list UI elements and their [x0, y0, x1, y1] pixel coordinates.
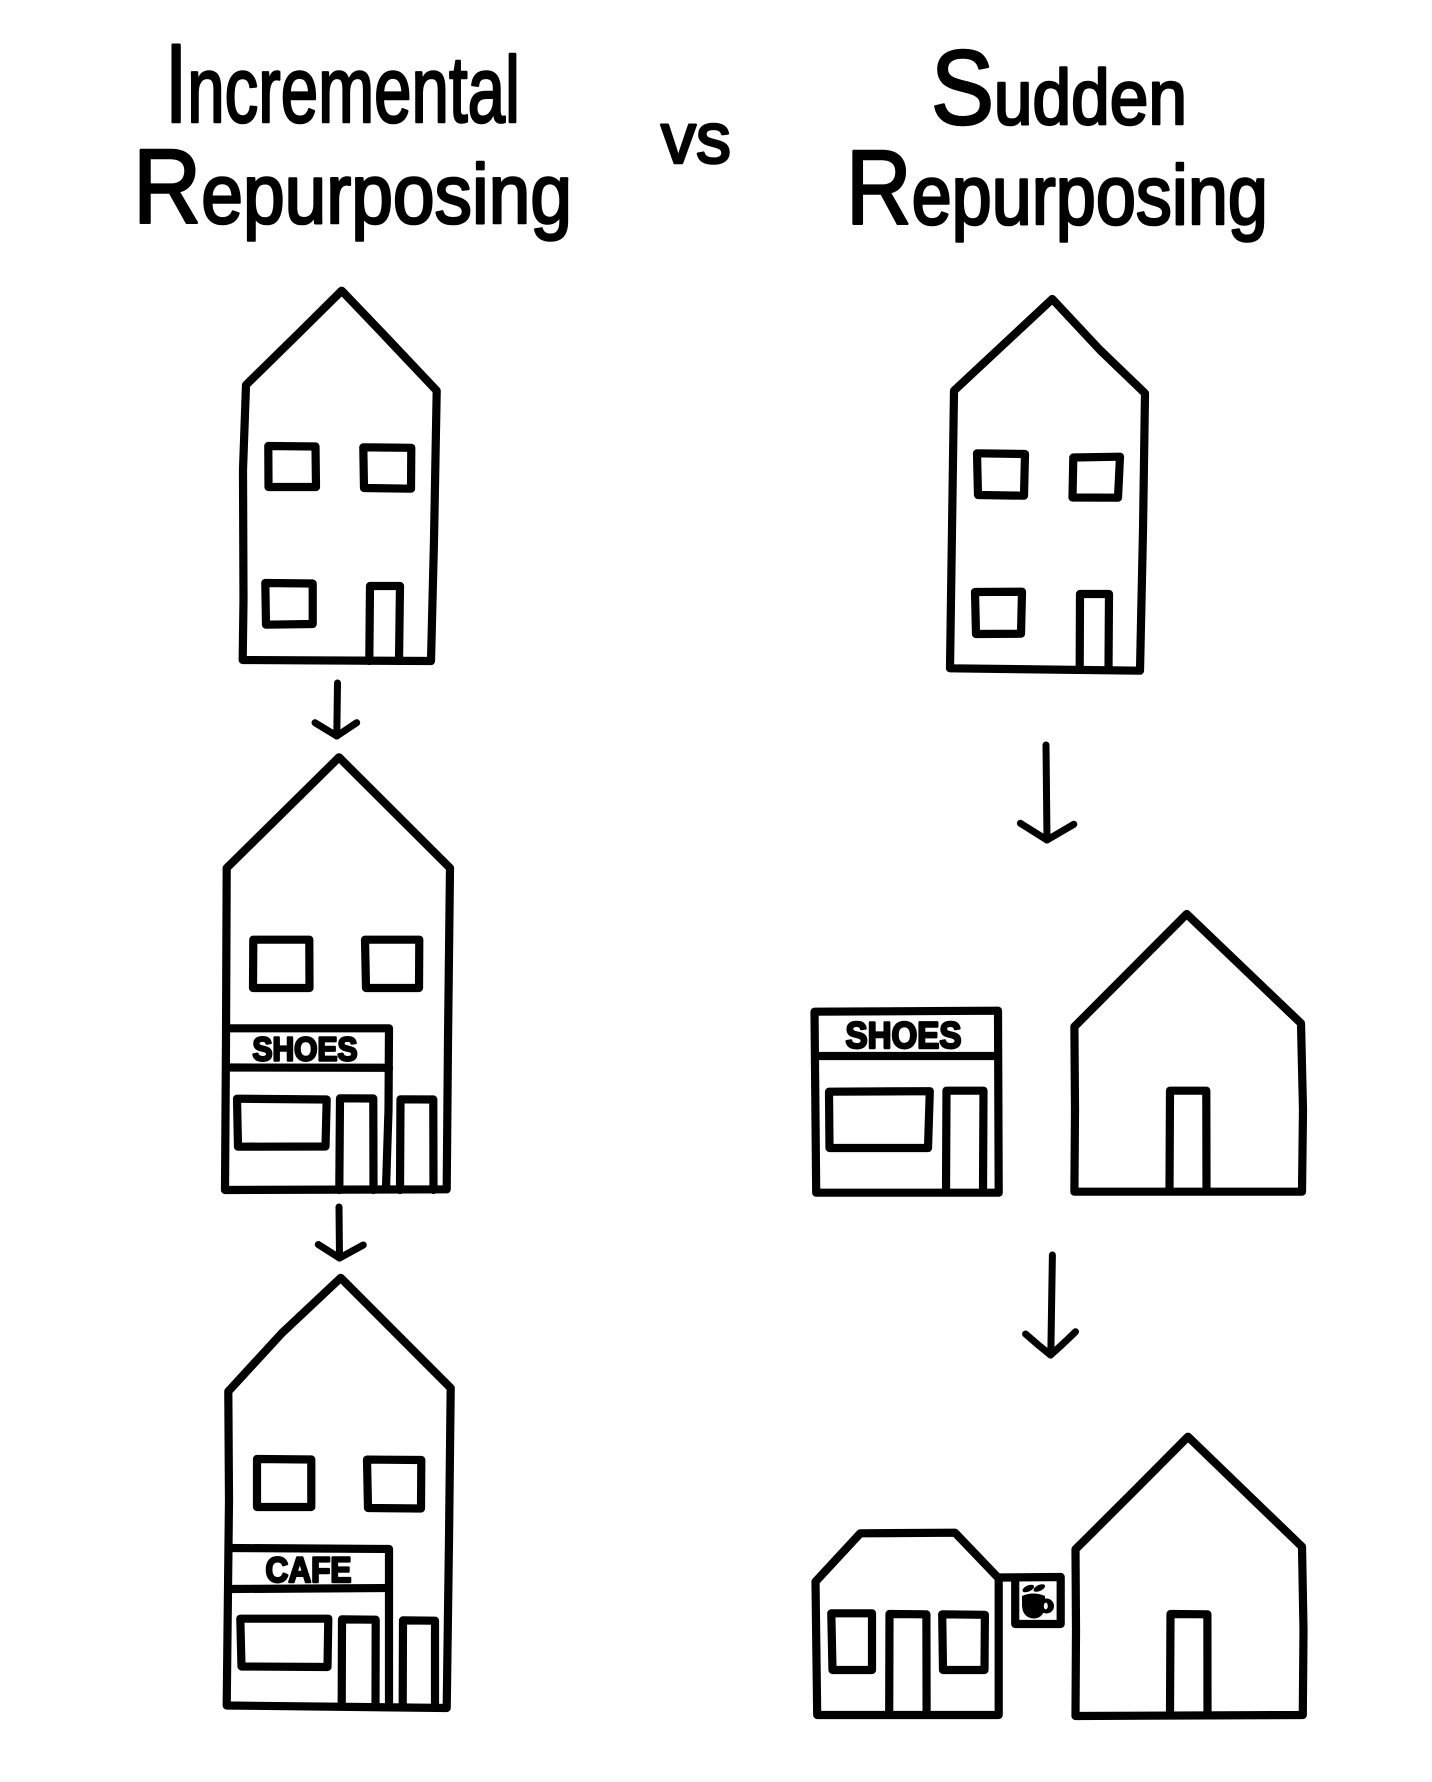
title: Sudden Repurposing: Sudden [931, 29, 1187, 147]
title: Sudden Repurposing [846, 29, 1268, 247]
right column: remaining house [1074, 914, 1303, 1192]
right column: separate shoe shop [814, 1011, 999, 1193]
cafe sign [228, 1548, 389, 1706]
title: Incremental Repurposing: Incremental [165, 21, 520, 146]
left column: house with shoe shop [225, 757, 450, 1190]
title: Incremental Repurposing [133, 21, 572, 246]
arrow: shoe shop to cafe conversion [318, 1207, 363, 1258]
arrow: house to shoe shop conversion [315, 683, 357, 736]
left column: house with cafe [227, 1278, 451, 1708]
shoe shop sign: SHOES [846, 1015, 962, 1056]
arrow: house split into shop and house [1020, 745, 1074, 840]
arrow: shoe shop to cafe replacement [1026, 1255, 1076, 1355]
icon: coffee cup [1021, 1583, 1054, 1618]
vs label: vs [661, 99, 731, 179]
left column: house [243, 291, 437, 661]
cafe hanging sign with coffee cup [999, 1577, 1061, 1624]
cafe sign: CAFE [266, 1551, 352, 1590]
title: Incremental Repurposing: Repurposing [133, 128, 572, 246]
right column: house beside cafe [1076, 1437, 1304, 1716]
title: Sudden Repurposing: Repurposing [846, 129, 1268, 247]
right column: house [950, 299, 1145, 671]
shoe shop sign: SHOES [252, 1030, 358, 1068]
right column: separate cafe [816, 1533, 1061, 1715]
shoe shop sign [226, 1028, 389, 1188]
